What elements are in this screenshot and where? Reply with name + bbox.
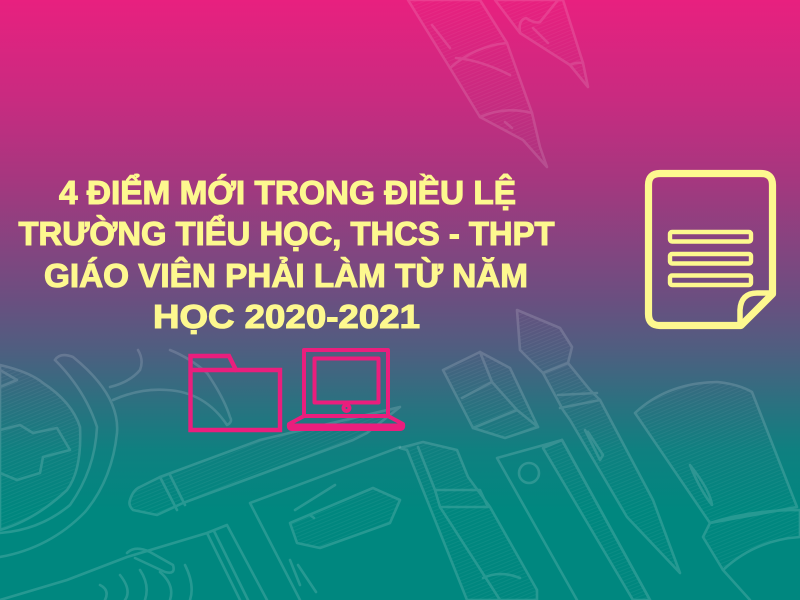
icon: document: [648, 174, 772, 326]
sketch: ring-bound book: [0, 525, 267, 600]
icon: folder: [190, 356, 280, 430]
icon: laptop: [289, 350, 403, 429]
sketch: ruler: [497, 440, 650, 600]
title: GIÁO VIÊN PHẢI LÀM TỪ NĂM: [44, 257, 528, 294]
title: 4 ĐIỂM MỚI TRONG ĐIỀU LỆ: [59, 174, 516, 211]
title: HỌC 2020-2021: [153, 298, 420, 335]
sketch: left tube: [400, 442, 537, 600]
sketch: notebook: [250, 447, 400, 600]
sketch: paintbrush: [517, 310, 680, 573]
title: TRƯỜNG TIỂU HỌC, THCS - THPT: [18, 215, 554, 252]
sketch: globe: [0, 350, 231, 557]
sketch: marker pen: [129, 407, 400, 515]
sketch: large tube right: [635, 382, 800, 600]
title: [18, 174, 554, 335]
sketch: two pens at top: [408, 0, 588, 167]
sketch: eraser: [443, 352, 538, 438]
